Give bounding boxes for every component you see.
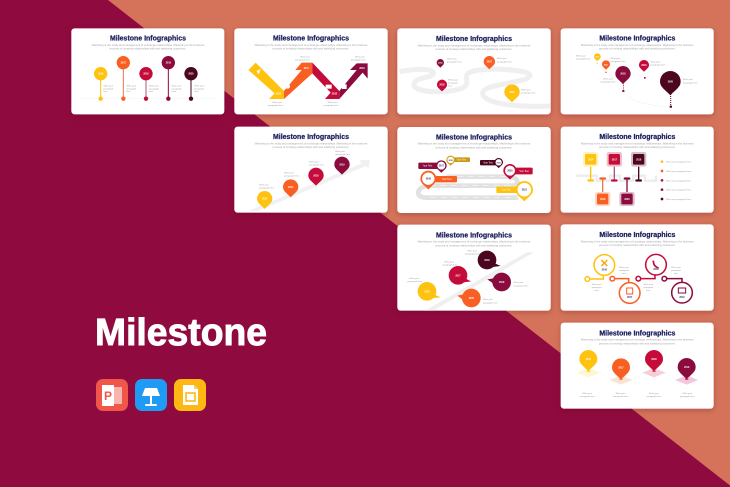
pin 5: Write your: [683, 78, 693, 81]
heading: Milestone Infographics: [436, 36, 512, 43]
bubble 1: paragraph here: [407, 280, 423, 283]
milestone 2: paragraph: [126, 87, 137, 90]
ring years: 2017: [627, 297, 633, 299]
pin 1: [437, 58, 463, 68]
bubble 5: [457, 289, 499, 307]
pin 1: Write your: [576, 54, 586, 57]
pin 4: [639, 60, 666, 79]
pin 5: [660, 71, 699, 108]
tile pin 4: Write your: [682, 392, 692, 395]
milestone 4: paragraph: [172, 87, 182, 90]
pin 4: Write your: [651, 60, 661, 63]
road: [418, 177, 518, 198]
tile pin 3: 2018: [651, 359, 657, 361]
intro text: process of creating relationships with and satisfying customers.: [436, 48, 513, 51]
label and pin 1: 2017: [439, 166, 445, 168]
ring years: 2016: [602, 270, 608, 272]
pin 4: paragraph here: [335, 153, 351, 156]
icon: PowerPoint: [96, 379, 128, 411]
milestone 3: Write your: [149, 85, 159, 88]
intro text: Marketing is the study and management of exchange relationships. Marketing is the business: [255, 142, 368, 145]
pin 3: Write your: [448, 79, 458, 82]
intro text: [581, 44, 695, 51]
captions: paragraph here: [324, 104, 339, 107]
pin 3: [601, 66, 631, 92]
node 5: 2020: [624, 199, 630, 201]
label and pin 3: Your Text: [483, 162, 493, 165]
pin 3: paragraph here: [601, 81, 616, 84]
pin 2: [283, 172, 300, 197]
intro text: Marketing is the study and management of exchange relationships. Marketing is the business: [418, 143, 531, 146]
bubble 2: Write your: [444, 261, 455, 264]
node 2: 2017: [612, 159, 618, 161]
bubble 5: 2020: [469, 298, 475, 300]
intro text: process of creating relationships with and satisfying customers.: [436, 146, 513, 149]
panel: square nodes card: [561, 127, 714, 213]
tile pin 3: paragraph here: [647, 395, 662, 398]
ring captions: [592, 266, 682, 292]
label and pin 6: Your Text: [501, 189, 511, 192]
milestone 5: Write your: [194, 85, 204, 88]
ring years: 2019: [679, 297, 685, 299]
intro text: process of creating relationships with and satisfying customers.: [599, 48, 676, 51]
pin 2: 2017: [487, 62, 493, 64]
heading: Milestone Infographics: [599, 330, 675, 337]
pin 4: [504, 84, 537, 102]
pin 3: 2018: [313, 175, 319, 177]
panel: growing pins card: [561, 28, 714, 114]
ring 1: [585, 255, 615, 281]
milestone 2: here: [126, 90, 131, 93]
milestone 1: Write your: [103, 85, 113, 88]
milestone 1: [94, 67, 114, 101]
pin 1: 2016: [438, 63, 443, 65]
intro text: Marketing is the study and management of exchange relationships. Marketing is the business: [581, 339, 695, 342]
label and pin 3: 2019: [497, 162, 501, 164]
intro text: [255, 142, 368, 149]
pin 2: Write your: [497, 57, 507, 60]
heading: Milestone Infographics: [599, 36, 675, 43]
panel: ring icons card: [561, 224, 714, 311]
right columns, upper rows: [397, 28, 714, 213]
tile pin 2: paragraph here: [613, 395, 629, 398]
node 3: 2018: [636, 159, 642, 161]
pin 3: here: [448, 85, 453, 88]
legend: Write your paragraph here: [666, 161, 692, 164]
intro text: process of creating relationships with and satisfying customers.: [273, 48, 350, 51]
zigzag arrow: 2017: [304, 68, 310, 70]
milestone 4: here: [172, 90, 177, 93]
pin 3: 2018: [620, 74, 626, 76]
ring captions: here: [622, 272, 627, 275]
pin 3: 2018: [439, 85, 445, 87]
ring 3: [636, 254, 666, 281]
intro text: [418, 143, 531, 149]
pin 5: paragraph here: [683, 81, 699, 84]
bubble 1: Write your: [409, 277, 419, 280]
captions: paragraph here: [268, 104, 284, 107]
ring captions: paragraph: [671, 269, 682, 272]
milestone 1: 2016: [98, 74, 104, 76]
ring 4: [662, 276, 692, 303]
ring captions: Write your: [671, 266, 681, 269]
milestone 2: Write your: [126, 85, 136, 88]
ring captions: paragraph: [592, 286, 602, 289]
intro text: process of creating relationships with and satisfying customers.: [110, 48, 187, 51]
ring captions: paragraph: [643, 286, 654, 289]
pin 1: paragraph here: [447, 61, 463, 64]
diagonal road: [425, 252, 534, 311]
node 4: 2019: [600, 199, 606, 201]
pin 2: 2017: [288, 187, 294, 189]
pin 1: [257, 183, 275, 209]
intro text: [581, 339, 695, 345]
pin 3: paragraph here: [309, 163, 325, 166]
pin 1: Write your: [447, 58, 457, 61]
intro text: [581, 240, 695, 247]
intro text: [418, 44, 531, 51]
legend: Write your paragraph here: [666, 198, 692, 201]
label and pin 4: [503, 164, 533, 180]
captions: Write your: [355, 55, 365, 58]
icon: PowerPoint: P: [104, 389, 112, 403]
pin 5: 2020: [668, 81, 674, 83]
heading: Milestone Infographics: [599, 232, 675, 239]
panel: rising pins card: [234, 127, 388, 213]
milestone 1: paragraph: [103, 87, 114, 90]
pin 1: [576, 53, 601, 64]
intro text: Marketing is the study and management of exchange relationships. Marketing is the business: [581, 240, 695, 243]
milestone 3: [139, 67, 160, 101]
panel: pins on tiles card: [561, 323, 714, 409]
tile pin 1: Write your: [582, 392, 593, 395]
captions: Write your: [272, 101, 282, 104]
left column cards: [71, 28, 388, 213]
zigzag arrow: [248, 63, 368, 99]
legend: Write your paragraph here: [666, 170, 692, 173]
bubble 2: 2017: [455, 275, 461, 277]
pin 2: paragraph here: [497, 61, 513, 64]
bubble 4: paragraph here: [514, 284, 529, 287]
milestone 3: 2018: [143, 74, 149, 76]
ring years: 2018: [653, 269, 659, 271]
bubble 3: paragraph here: [465, 252, 481, 255]
intro text: [255, 44, 368, 51]
intro text: [92, 44, 205, 51]
node 4: [595, 177, 610, 206]
tile pin 2: Write your: [616, 392, 626, 395]
intro text: process of creating relationships with and satisfying customers.: [273, 146, 350, 149]
bubble 3: Write your: [467, 249, 478, 252]
label and pin 5: [420, 171, 457, 189]
heading: Milestone Infographics: [599, 134, 675, 141]
node 1: 2016: [588, 159, 594, 161]
label and pin 2: [446, 156, 470, 166]
intro text: process of creating relationships with and satisfying customers.: [599, 244, 676, 247]
milestone 4: 2019: [166, 63, 172, 65]
pin 4: 2019: [509, 92, 515, 94]
heading: Milestone Infographics: [273, 36, 349, 43]
ring captions: Write your: [643, 283, 653, 286]
bubble 1: 2016: [424, 291, 430, 293]
tile pin 1: 2016: [586, 359, 592, 361]
captions: paragraph here: [295, 58, 311, 61]
panel: timeline card: [71, 28, 224, 114]
intro text: [581, 142, 695, 149]
node 3: [631, 152, 646, 182]
pin 1: 2016: [262, 199, 268, 201]
tile pin 2: [610, 358, 633, 398]
zigzag arrow: 2019: [359, 68, 365, 70]
pin 2: paragraph here: [284, 175, 300, 178]
tile pin 2: 2017: [618, 367, 624, 369]
panel: winding road card: [397, 28, 551, 114]
intro text: Marketing is the study and management of exchange relationships. Marketing is the business: [255, 44, 368, 47]
milestone 3: here: [149, 90, 154, 93]
bubble 2: [443, 261, 471, 285]
intro text: Marketing is the study and management of exchange relationships. Marketing is the business: [418, 241, 531, 244]
label and pin 5: 2016: [426, 179, 432, 181]
panel: road with labelled pins card: [397, 127, 551, 213]
tile pin 4: paragraph here: [680, 395, 696, 398]
intro text: process of creating relationships with and satisfying customers.: [436, 244, 513, 247]
ring captions: here: [595, 289, 600, 292]
intro text: process of creating relationships with and satisfying customers.: [599, 146, 676, 149]
pin 2: Write your: [611, 57, 621, 60]
milestone 2: 2017: [121, 63, 127, 65]
pin 1: paragraph here: [259, 186, 275, 189]
label and pin 4: Your Text: [519, 170, 529, 173]
milestone 5: here: [194, 90, 199, 93]
pin 4: Write your: [521, 89, 531, 92]
label and pin 3: [480, 158, 503, 168]
intro text: [418, 241, 531, 247]
tile pin 4: [675, 358, 698, 398]
label and pin 5: Your Text: [442, 178, 452, 181]
tile pin 1: [577, 350, 600, 398]
pin 4: paragraph here: [651, 64, 666, 67]
label and pin 1: [418, 160, 447, 173]
heading: Milestone Infographics: [436, 134, 512, 141]
pin 4: 2019: [641, 65, 647, 67]
milestone 5: paragraph: [194, 87, 205, 90]
bubble 3: [465, 249, 501, 269]
intro text: Marketing is the study and management of exchange relationships. Marketing is the business: [418, 44, 531, 47]
zigzag arrow: 2018: [332, 94, 338, 96]
pin 2: [602, 57, 626, 73]
bubble 1: [407, 277, 441, 301]
pin 4: Write your: [335, 150, 345, 153]
node 5: [619, 177, 635, 206]
bubble 5: paragraph here: [483, 301, 499, 304]
main title: Milestone: [95, 312, 267, 354]
pin 3: Write your: [309, 160, 319, 163]
road arrow: [248, 160, 370, 211]
bubble 3: 2018: [484, 260, 490, 262]
heading: Milestone Infographics: [273, 134, 349, 141]
label and pin 2: Your Text: [457, 159, 466, 162]
tile pin 4: 2019: [684, 367, 690, 369]
bubble 5: Write your: [483, 298, 493, 301]
ring captions: Write your: [592, 283, 602, 286]
ring 2: [610, 276, 640, 303]
pin 1: Write your: [259, 183, 269, 186]
node 1: [583, 152, 598, 182]
ring captions: here: [674, 272, 679, 275]
stepped road: [576, 176, 656, 181]
milestone 4: Write your: [172, 85, 182, 88]
milestone 3: paragraph: [149, 87, 160, 90]
pin 1: paragraph here: [576, 57, 592, 60]
milestone 2: [117, 56, 137, 101]
zigzag arrow: 2016: [276, 94, 282, 96]
heading: Milestone Infographics: [436, 232, 512, 239]
label and pin 1: Your Text: [423, 165, 432, 168]
pin 2: [484, 56, 513, 69]
legend: Write your paragraph here: [666, 179, 692, 182]
icon: Keynote: [135, 379, 167, 411]
captions: Write your: [328, 101, 338, 104]
bubble 4: 2019: [499, 282, 505, 284]
captions: [268, 55, 367, 107]
captions: paragraph here: [351, 58, 367, 61]
captions: Write your: [300, 55, 310, 58]
label and pin 2: 2018: [449, 160, 453, 162]
intro text: Marketing is the study and management of exchange relationships. Marketing is the business: [92, 44, 205, 47]
milestone 1: here: [103, 90, 108, 93]
node 2: [607, 152, 622, 182]
pin 2: 2017: [604, 64, 609, 66]
pin 3: paragraph: [448, 82, 459, 85]
pin 2: Write your: [284, 172, 294, 175]
panel: speech bubbles card: [397, 225, 551, 311]
intro text: Marketing is the study and management of exchange relationships. Marketing is the business: [581, 44, 695, 47]
legend: Write your paragraph here: [666, 189, 692, 192]
ring captions: paragraph: [619, 269, 630, 272]
ring captions: here: [646, 289, 651, 292]
legend: [661, 160, 692, 201]
panel: zigzag arrow card: [234, 28, 388, 114]
intro text: process of creating relationships with and satisfying customers.: [599, 342, 676, 345]
milestone 5: [184, 67, 205, 101]
pin 3: Write your: [603, 77, 613, 80]
icon: Google Slides: [174, 379, 206, 411]
milestone 5: 2020: [188, 74, 194, 76]
label and pin 6: 2021: [522, 190, 528, 192]
label and pin 6: [496, 181, 533, 201]
pin 3: [437, 79, 459, 91]
pin 4: 2019: [339, 164, 345, 166]
tile pin 1: paragraph here: [580, 395, 596, 398]
pin 4: [334, 150, 351, 175]
ring captions: Write your: [619, 266, 629, 269]
pin 1: 2016: [595, 57, 599, 59]
pin 2: paragraph here: [611, 60, 626, 63]
winding road: [399, 69, 550, 106]
milestone 4: [162, 56, 182, 101]
heading: Milestone Infographics: [110, 36, 186, 43]
intro text: Marketing is the study and management of exchange relationships. Marketing is the business: [581, 142, 695, 145]
bubble 4: [487, 273, 529, 291]
tile pin 3: [642, 350, 666, 398]
bubble 4: Write your: [514, 281, 524, 284]
label and pin 4: 2020: [507, 171, 513, 173]
tile pin 3: Write your: [649, 392, 659, 395]
ring years: [602, 269, 685, 299]
right columns, lower rows: [397, 224, 714, 409]
pin 4: paragraph here: [521, 92, 537, 95]
pin 3: [308, 160, 325, 186]
bubble 2: paragraph here: [443, 264, 458, 267]
